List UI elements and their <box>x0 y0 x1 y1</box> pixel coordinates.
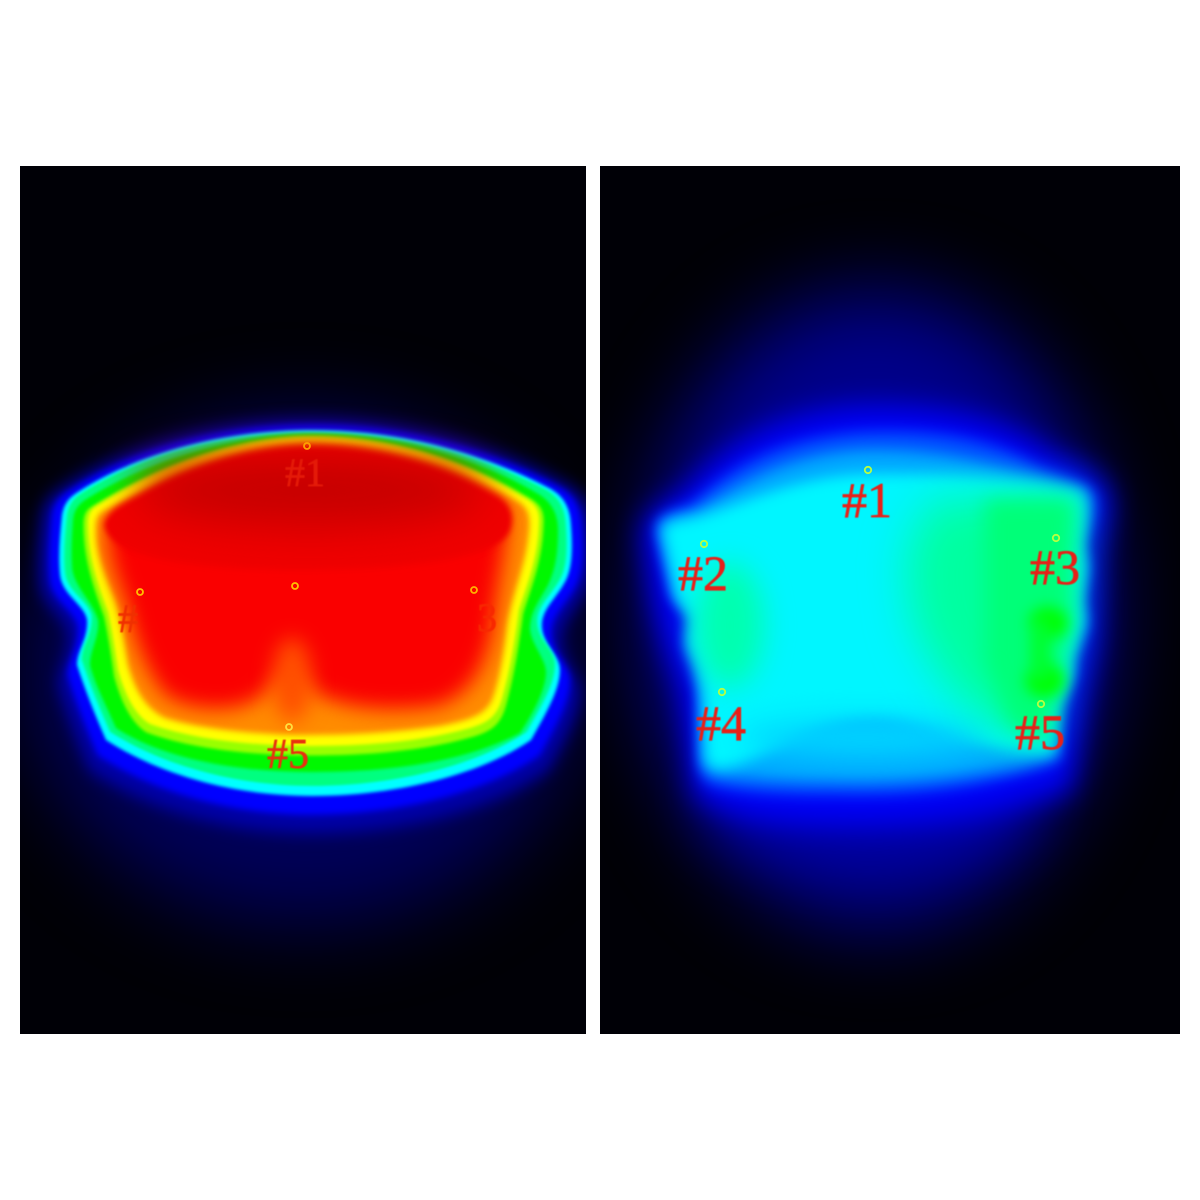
right label #1: #1 <box>842 472 892 528</box>
right label #2: #2 <box>678 545 728 601</box>
left map: yellow contour <box>88 438 539 746</box>
right map: blue halo <box>642 405 1110 825</box>
left map: lime contour <box>84 435 544 756</box>
panel: right intensity map <box>600 166 1180 1034</box>
panel: left intensity map <box>20 166 593 1034</box>
right map: lower blue glow <box>710 745 1030 855</box>
left label #1 <box>285 442 323 486</box>
right map: azure body <box>656 431 1095 795</box>
right label #5: #5 <box>1015 704 1065 760</box>
right map: soft lower centre wash <box>740 718 990 758</box>
right map: outer navy glow <box>640 290 1110 930</box>
left map: orange contour <box>96 443 529 735</box>
right map: cyan body <box>664 474 1083 768</box>
left map: red top edge <box>104 447 512 570</box>
left map: outer navy glow <box>25 415 585 925</box>
left label #2, partly hidden <box>118 589 143 641</box>
left label #3, partly hidden <box>470 586 496 632</box>
left map: dark red upper zone <box>135 454 485 526</box>
left map: orange central streak <box>272 638 312 722</box>
left map: spring-green contour <box>64 433 567 786</box>
left map: red core <box>108 449 506 709</box>
right map: light blue body <box>660 450 1088 782</box>
right label #4: #4 <box>696 695 746 751</box>
right label #3: #3 <box>1030 539 1080 595</box>
left map: deep blue halo <box>39 420 593 833</box>
left label #2, partly hidden: # <box>118 596 138 641</box>
left map: blue contour <box>49 425 582 815</box>
right map: left green zone <box>696 563 764 687</box>
left label #5: #5 <box>267 732 309 778</box>
right map: spring-green right zone <box>905 495 1075 745</box>
left label #1: #1 <box>285 450 325 495</box>
left centre marker <box>292 583 298 589</box>
right map: pure green blobs <box>1025 607 1068 697</box>
figure: side-by-side intensity maps <box>20 166 1180 1034</box>
right map: green right edge <box>985 498 1076 742</box>
left label #5 <box>266 723 308 770</box>
left label #3, partly hidden: 3 <box>477 595 497 640</box>
left map: green contour <box>72 434 558 772</box>
left map: cyan contour <box>59 430 572 796</box>
